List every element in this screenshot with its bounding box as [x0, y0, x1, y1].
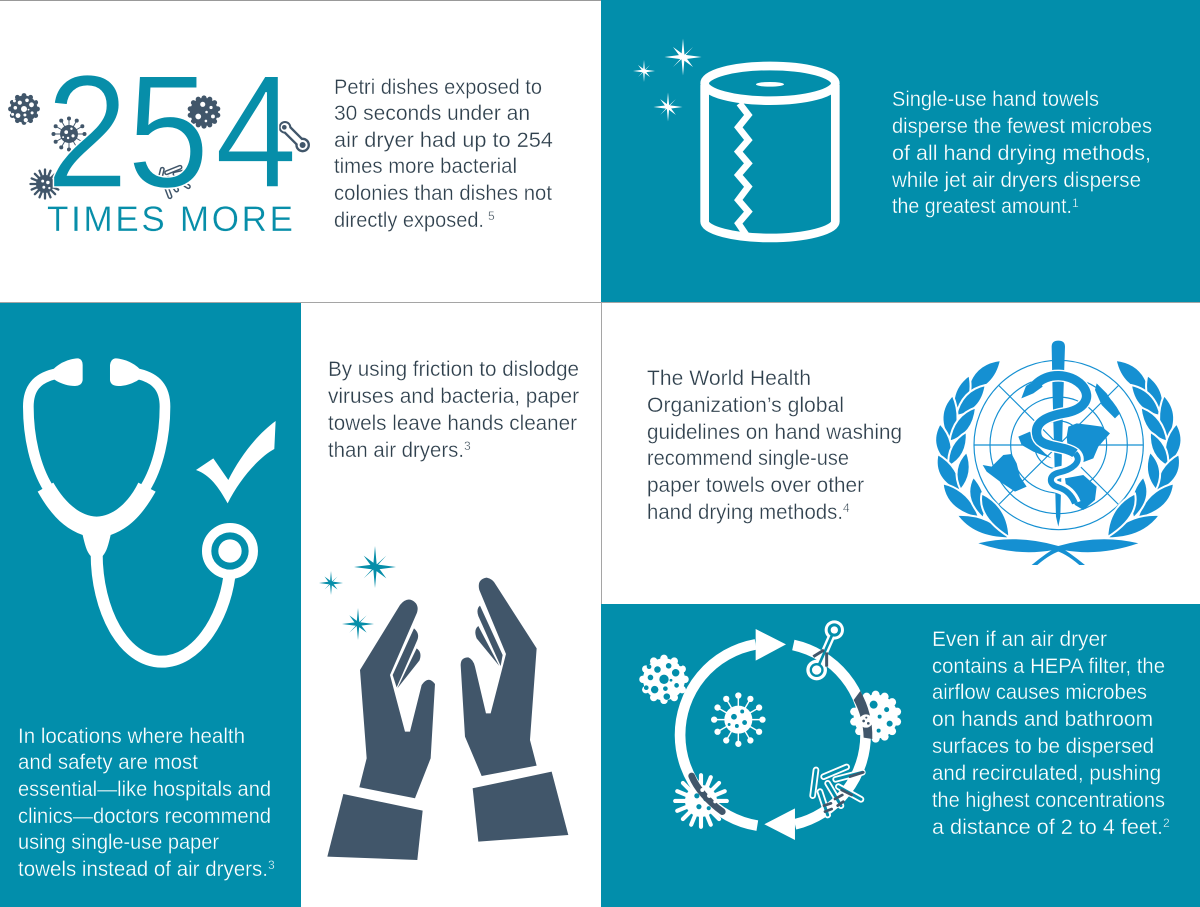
big number 254: 254	[46, 41, 297, 221]
text: petri dishes: 5	[488, 209, 495, 223]
panel: 254 times more	[0, 0, 601, 302]
text: WHO guidelines: The World Health	[647, 367, 811, 390]
text: petri dishes: times more bacterial	[334, 155, 517, 178]
text: HEPA filter: and recirculated, pushing	[932, 762, 1161, 785]
text: friction: 3	[464, 439, 471, 453]
text: HEPA filter: the highest concentrations	[932, 789, 1165, 812]
text: single-use hand towels: disperse the fewest microbes	[892, 115, 1152, 138]
text: HEPA filter	[932, 628, 1170, 839]
text: friction: than air dryers.	[328, 439, 464, 462]
text: WHO guidelines: Organization’s global	[647, 394, 844, 417]
text: WHO guidelines: guidelines on hand washing	[647, 421, 902, 444]
icon: spiky microbe	[675, 775, 727, 827]
text: friction: By using friction to dislodge	[328, 358, 579, 381]
panel: paper towel roll	[601, 0, 1200, 302]
text: single-use hand towels: Single-use hand towels	[892, 88, 1099, 111]
text: HEPA filter: on hands and bathroom	[932, 708, 1153, 731]
text: WHO guidelines: hand drying methods.	[647, 501, 843, 524]
text: health and safety: towels instead of air dryers.	[18, 858, 268, 881]
text: health and safety: using single-use paper	[18, 831, 219, 854]
icon: stethoscope with check mark	[28, 358, 276, 662]
text: petri dishes: 30 seconds under an	[334, 102, 530, 125]
icon: pollen	[639, 655, 689, 704]
icon: paper towel roll	[705, 66, 835, 238]
text: HEPA filter: a distance of 2 to 4 feet.	[932, 816, 1163, 839]
text: friction	[328, 358, 579, 462]
text: HEPA filter: 2	[1163, 816, 1170, 830]
icon: WHO emblem	[935, 341, 1181, 565]
text: single-use hand towels: while jet air dryers disperse	[891, 169, 1141, 192]
text: WHO guidelines: paper towels over other	[647, 474, 864, 497]
text: HEPA filter: Even if an air dryer	[932, 628, 1107, 651]
icon: sparkles	[319, 546, 396, 640]
icon: bumpy microbe	[850, 691, 901, 743]
icon: recirculation cycle with microbes	[639, 620, 901, 840]
heading: times more: TIMES MORE	[47, 200, 293, 239]
text: single-use hand towels: 1	[1072, 196, 1079, 210]
text: health and safety: and safety are most	[18, 751, 198, 774]
text: petri dishes: directly exposed.	[334, 209, 484, 232]
panel: HEPA filter recirculation	[601, 604, 1200, 907]
icon: link bacterium	[806, 620, 844, 680]
arrow: left arc	[680, 629, 786, 826]
text: friction: towels leave hands cleaner	[328, 412, 577, 435]
text: friction: viruses and bacteria, paper	[328, 385, 579, 408]
text: single-use hand towels: of all hand drying methods,	[892, 142, 1151, 165]
text: petri dishes	[334, 76, 553, 232]
panel: doctors recommend	[0, 303, 301, 907]
text: HEPA filter: airflow causes microbes	[932, 681, 1147, 704]
text: single-use hand towels: the greatest amount.	[892, 195, 1072, 218]
text: health and safety: In locations where health	[18, 725, 245, 748]
text: petri dishes: colonies than dishes not	[334, 182, 552, 205]
text: petri dishes: Petri dishes exposed to	[334, 76, 542, 99]
icon: rod bacteria	[813, 767, 863, 815]
text: HEPA filter: contains a HEPA filter, the	[932, 655, 1165, 678]
text: HEPA filter: surfaces to be dispersed	[932, 735, 1154, 758]
panel: world health organization	[601, 303, 1200, 604]
text: health and safety: 3	[268, 858, 275, 872]
text: WHO guidelines	[647, 367, 902, 524]
arrow: right arc	[764, 645, 866, 840]
icon: microbes behind 254	[8, 93, 310, 198]
text: single-use hand towels	[891, 88, 1152, 218]
text: petri dishes: air dryer had up to 254	[334, 129, 553, 152]
text: WHO guidelines: recommend single-use	[647, 447, 849, 470]
text: WHO guidelines: 4	[843, 501, 850, 515]
text: health and safety	[18, 725, 275, 881]
icon: sparkles	[633, 38, 702, 122]
icon: hands	[327, 578, 568, 860]
text: health and safety: clinics—doctors recommend	[18, 805, 271, 828]
panel: friction and clean hands	[301, 303, 601, 907]
text: health and safety: essential—like hospitals and	[18, 778, 271, 801]
icon: virus	[711, 692, 766, 747]
